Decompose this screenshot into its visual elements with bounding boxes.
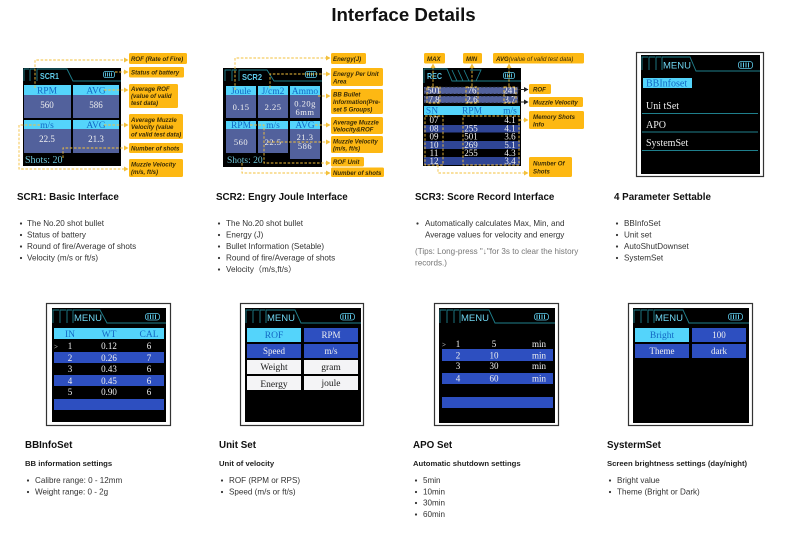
list: SCR2 features: Energy (J)	[226, 230, 264, 240]
screen: SCR1: 21.3	[88, 134, 104, 144]
callout: memory shots info: Info	[533, 122, 544, 128]
screen: SCR3 record table: SN	[426, 106, 438, 116]
panel: BBInfoSet screen: >	[54, 343, 58, 351]
callout: average muzzle velocity	[129, 114, 183, 139]
list: parameters	[616, 219, 690, 262]
panel: main menu screen	[636, 52, 764, 176]
screen: SCR3 record table	[423, 68, 521, 166]
panel: BBInfoSet screen: 3	[68, 364, 73, 374]
panel: main menu screen: APO	[646, 120, 666, 131]
callout: MAX: MAX	[427, 56, 441, 63]
callout: number of shots: Shots	[533, 168, 551, 176]
screen: SCR3 record table: 4.1	[504, 124, 516, 134]
callout: MIN: MIN	[466, 56, 478, 63]
callout: MAX	[424, 53, 445, 64]
list: SCR2 features: Bullet Information (Setable)	[226, 242, 324, 251]
panel: main menu screen: MENU	[663, 60, 691, 72]
list: SCR2 features: Round of fire/Average of shots	[226, 254, 335, 262]
panel: APO Set screen	[434, 304, 558, 426]
list: BBInfoSet ranges: Calibre range: 0 - 12mm	[35, 476, 123, 485]
list: system settings: Theme (Bright or Dark)	[617, 488, 700, 496]
callout connectors: SCR2	[235, 58, 330, 173]
heading: BBInfoSet: BBInfoSet	[25, 440, 73, 451]
screen: SCR3 record table: 3.4	[504, 156, 516, 166]
list: shutdown times	[415, 476, 445, 519]
screen: SCR1: AVG	[86, 121, 106, 131]
panel: BBInfoSet screen: 6	[147, 376, 152, 386]
callout: ROF	[529, 84, 551, 94]
screen: SCR3 record table: 2.6	[466, 94, 478, 104]
screen: SCR1: SCR1	[40, 71, 59, 81]
screen: SCR1: AVG	[86, 86, 106, 96]
callout: energy per unit area: Area	[332, 78, 347, 86]
list: SCR2 features	[218, 219, 335, 274]
screen: SCR1: 22.5	[39, 134, 55, 144]
screen: SCR3 record table: 12	[430, 156, 438, 166]
callout: muzzle velocity	[331, 136, 383, 153]
screen: SCR2: J/cm2	[262, 87, 285, 97]
panel: BBInfoSet screen: 4	[68, 376, 73, 386]
screen: SCR3 record table: 4.1	[504, 115, 516, 125]
callout: average ROF	[129, 84, 178, 108]
callout: MIN	[463, 53, 482, 64]
panel: BBInfoSet screen: 0.26	[101, 353, 117, 363]
panel: BBInfoSet screen: 0.90	[101, 387, 117, 397]
list: shutdown times: 10min	[423, 488, 445, 496]
screen: SCR2: Joule	[231, 87, 251, 97]
panel: Unit Set screen: MENU	[267, 313, 295, 324]
panel: SCR1 screen with callouts	[19, 53, 187, 177]
callout: number of shots	[529, 157, 572, 177]
callout: energy per unit area: Energy Per Unit	[333, 71, 380, 78]
callout: ROF unit: ROF Unit	[333, 159, 360, 166]
callout: number of shots: Number of shots	[333, 170, 382, 177]
list: parameters: SystemSet	[624, 254, 664, 262]
subheading: unit of velocity: Unit of velocity	[219, 459, 275, 468]
callout: BB bullet information: Information(Pre-	[333, 99, 380, 106]
list: units: Speed (m/s or ft/s)	[229, 488, 296, 496]
subheading: screen brightness: Screen brightness settings (day/night)	[607, 459, 748, 468]
screen: SCR2: m/s	[266, 121, 280, 131]
screen: SCR1: RPM	[37, 86, 58, 96]
callout: energy	[331, 53, 366, 64]
callout: muzzle velocity: Muzzle Velocity	[333, 138, 378, 146]
screen: SCR3 record table: 11	[430, 148, 438, 158]
list: BBInfoSet ranges: Weight range: 0 - 2g	[35, 488, 108, 496]
screen: SCR2: 0.20g	[294, 98, 316, 108]
panel: main menu screen: Uni tSet	[646, 101, 679, 112]
panel: Unit Set screen: ROF	[265, 331, 283, 341]
list: SCR1 features: The No.20 shot bullet	[27, 219, 105, 228]
callout: muzzle velocity: (m/s, ft/s)	[333, 146, 360, 152]
panel: APO Set screen: min	[532, 350, 546, 360]
panel: BBInfoSet screen: CAL	[140, 330, 159, 340]
callout: battery status	[129, 67, 184, 78]
panel: APO Set screen: 4	[456, 374, 461, 384]
panel: BBInfoSet screen: 0.45	[101, 376, 117, 386]
screen: SCR2: 0.15	[233, 102, 249, 112]
list: parameters: AutoShutDownset	[624, 242, 690, 251]
subheading: BB information settings: BB information settings	[25, 459, 112, 468]
screen: SCR3 record table: 5.1	[504, 140, 516, 150]
screen: SCR2: RPM	[231, 121, 252, 131]
screen: SCR2	[223, 68, 322, 167]
panel: Unit Set screen: RPM	[321, 330, 341, 340]
screen: SCR2: 2.25	[265, 102, 281, 112]
panel: System Set screen: dark	[711, 346, 727, 356]
screen: SCR1: 586	[89, 100, 103, 110]
callout: ROF: ROF	[533, 86, 546, 94]
list: shutdown times: 5min	[423, 476, 441, 485]
screen: SCR3 record table: 4.3	[504, 148, 516, 158]
panel: BBInfoSet screen: 2	[68, 353, 72, 363]
screen: SCR3 record table: 3.7	[504, 94, 516, 104]
panel: Unit Set screen: Energy	[260, 380, 288, 390]
screen: SCR3 record table: REC	[427, 71, 442, 81]
callout: BB bullet information: set 5 Groups)	[333, 106, 372, 114]
panel: APO Set screen: 3	[456, 361, 461, 371]
list: SCR2 features: Velocity（m/s,ft/s）	[226, 265, 296, 274]
screen: SCR2: Ammo	[292, 87, 318, 97]
panel: BBInfoSet screen: 6	[147, 364, 152, 374]
screen: SCR1: m/s	[40, 121, 54, 131]
panel: main menu screen: SystemSet	[646, 138, 688, 149]
screen: SCR3 record table: m/s	[503, 106, 517, 116]
callout: ROF unit	[331, 157, 364, 166]
callout: muzzle velocity: Muzzle Velocity	[533, 100, 578, 106]
note: SCR3 tips: records.)	[415, 258, 447, 268]
panel: BBInfoSet screen: IN	[65, 330, 75, 340]
panel: APO Set screen: min	[532, 374, 546, 384]
panel: APO Set screen: 2	[456, 350, 460, 360]
callout: memory shots info: Memory Shots	[533, 114, 576, 121]
callout connectors: SCR1	[19, 60, 128, 169]
callout: muzzle velocity: (m/s, ft/s)	[131, 169, 158, 176]
subheading: automatic shutdown: Automatic shutdown settings	[413, 459, 521, 468]
list: SCR1 features	[20, 219, 136, 262]
callout: average muzzle velocity and ROF	[331, 117, 383, 134]
list: SCR3 features	[416, 219, 565, 240]
panel: SCR3 screen with callouts	[423, 53, 584, 177]
screen: SCR3 record table: 501	[427, 86, 441, 96]
callout: ROF	[129, 53, 187, 64]
panel: APO Set screen: min	[532, 339, 546, 349]
list: SCR3 features: Average values for velocity and energy	[425, 230, 565, 240]
screen: SCR2: AVG	[295, 121, 315, 131]
heading: SCR2: SCR2: Engry Joule Interface	[216, 192, 348, 203]
panel: APO Set screen: 10	[490, 350, 499, 360]
panel: System Set screen	[628, 304, 752, 426]
screen: SCR2: 586	[298, 141, 312, 151]
panel: BBInfoSet screen: WT	[102, 330, 117, 340]
screen: SCR3 record table: 501	[464, 132, 478, 142]
panel: main menu screen: BBInfoset	[646, 78, 687, 90]
list: SCR1 features: Round of fire/Average of shots	[27, 242, 136, 251]
panel: Unit Set screen: gram	[321, 363, 341, 373]
callout: average ROF: Average ROF	[130, 86, 170, 93]
heading: 4 parameter settable: 4 Parameter Settable	[614, 192, 711, 203]
screen: SCR2: 6mm	[296, 107, 314, 117]
callout: muzzle velocity: Muzzle Velocity	[131, 162, 176, 168]
panel: System Set screen: MENU	[655, 313, 683, 324]
panel: System Set screen: Bright	[650, 331, 674, 341]
screen: SCR2: 21.3	[297, 132, 313, 142]
callout: AVG: AVG(value of valid test data)	[495, 56, 573, 63]
heading: SCR1: SCR1: Basic Interface	[17, 192, 119, 203]
screen: SCR3 record table: 09	[430, 132, 439, 142]
callout: memory shots info	[529, 111, 584, 129]
list: units: ROF (RPM or RPS)	[229, 476, 300, 485]
callout: AVG	[493, 53, 584, 64]
callout connectors: SCR3	[425, 64, 528, 173]
panel: APO Set screen: MENU	[461, 313, 489, 324]
panel: APO Set screen: 60	[490, 374, 499, 384]
callout: energy per unit area	[331, 68, 383, 86]
panel: BBInfoSet screen	[46, 304, 170, 426]
panel: Unit Set screen: m/s	[324, 346, 338, 356]
callout: ROF: ROF (Rate of Fire)	[131, 56, 183, 63]
list: parameters: BBInfoSet	[624, 219, 661, 228]
heading: Unit Set: Unit Set	[219, 440, 257, 451]
list: SCR2 features: The No.20 shot bullet	[226, 219, 304, 228]
panel: BBInfoSet screen: 1	[68, 341, 72, 351]
panel: BBInfoSet screen: 0.12	[101, 341, 117, 351]
list: SCR1 features: Velocity (m/s or ft/s)	[27, 254, 98, 262]
heading: SCR3: SCR3: Score Record Interface	[415, 192, 555, 203]
screen: SCR3 record table: 76	[468, 86, 477, 96]
panel: BBInfoSet screen: 7	[147, 353, 152, 363]
callout: muzzle velocity	[529, 97, 583, 107]
panel: BBInfoSet screen: 0.43	[101, 364, 117, 374]
list: system settings: Bright value	[617, 476, 660, 485]
screen: SCR3 record table: 10	[430, 140, 439, 150]
callout: number of shots: Number of shots	[131, 146, 180, 152]
panel: Unit Set screen: Weight	[260, 363, 288, 373]
list: system settings	[609, 476, 700, 496]
screen: SCR1	[23, 68, 121, 166]
panel: APO Set screen: 30	[490, 361, 499, 371]
panel: Unit Set screen	[240, 304, 364, 426]
list: SCR1 features: Status of battery	[27, 230, 87, 240]
note: SCR3 tips: (Tips: Long-press "↓"for 3s to clear the history	[415, 247, 579, 256]
callout: muzzle velocity	[129, 159, 183, 177]
screen: SCR2: 560	[234, 137, 248, 147]
callout: average muzzle velocity: Velocity (value	[131, 124, 174, 131]
callout: average muzzle velocity: of valid test data)	[131, 132, 181, 138]
list: BBInfoSet ranges	[27, 476, 123, 496]
callout: number of shots	[129, 143, 183, 153]
screen: SCR3 record table: 255	[464, 148, 478, 158]
callout: number of shots: Number Of	[533, 160, 565, 168]
list: shutdown times: 60min	[423, 510, 445, 519]
panel: BBInfoSet screen: 6	[147, 387, 152, 397]
list: units	[221, 476, 300, 496]
title: Interface Details	[331, 4, 476, 25]
screen: SCR2: SCR2	[242, 72, 262, 82]
panel: APO Set screen: 1	[456, 339, 460, 349]
screen: SCR3 record table: 07	[430, 115, 439, 125]
panel: BBInfoSet screen: 6	[147, 341, 152, 351]
callout: average muzzle velocity: Average Muzzle	[130, 117, 177, 124]
panel: APO Set screen: 5	[492, 339, 497, 349]
note: SCR3 tips	[415, 247, 579, 268]
screen: SCR1: Shots: 20	[25, 155, 63, 166]
panel: BBInfoSet screen: MENU	[74, 313, 102, 324]
callout: average ROF: (value of valid	[131, 93, 172, 100]
panel: System Set screen: Theme	[650, 346, 674, 356]
callout: average muzzle velocity and ROF: Velocity&ROF	[333, 126, 374, 134]
screen: SCR2: 22.5	[265, 137, 281, 147]
screen: SCR3 record table: 255	[464, 124, 478, 134]
callout: average ROF: test data)	[131, 100, 158, 107]
panel: APO Set screen: >	[442, 341, 446, 349]
heading: SystermSet: SystermSet	[607, 440, 662, 451]
screen: SCR3 record table: 269	[464, 140, 478, 150]
callout: average muzzle velocity and ROF: Average Muzzle	[332, 120, 379, 126]
list: parameters: Unit set	[624, 230, 652, 240]
callout: energy: Energy(J)	[333, 56, 361, 63]
screen: SCR3 record table: 08	[430, 124, 439, 134]
callout: BB bullet information: BB Bullet	[333, 92, 361, 98]
panel: APO Set screen: min	[532, 361, 546, 371]
list: shutdown times: 30min	[423, 498, 445, 508]
callout: number of shots	[331, 168, 384, 177]
screen: SCR2: Shots: 20	[227, 156, 263, 166]
callout: BB bullet information	[331, 89, 383, 114]
heading: APO Set: APO Set	[413, 440, 453, 451]
screen: SCR3 record table: 7.8	[428, 94, 440, 104]
screen: SCR1: 560	[40, 100, 54, 110]
panel: BBInfoSet screen: 5	[68, 387, 73, 397]
screen: SCR3 record table: 3.6	[504, 132, 516, 142]
panel: Unit Set screen: Speed	[263, 346, 285, 356]
panel: SCR2 screen with callouts	[223, 53, 384, 177]
panel: Unit Set screen: joule	[320, 379, 340, 389]
screen: SCR3 record table: RPM	[462, 106, 483, 116]
panel: System Set screen: 100	[712, 330, 726, 340]
screen: SCR3 record table: 241	[503, 86, 517, 96]
list: SCR3 features: Automatically calculates Max, Min, and	[425, 219, 564, 228]
callout: battery status: Status of battery	[131, 70, 180, 76]
